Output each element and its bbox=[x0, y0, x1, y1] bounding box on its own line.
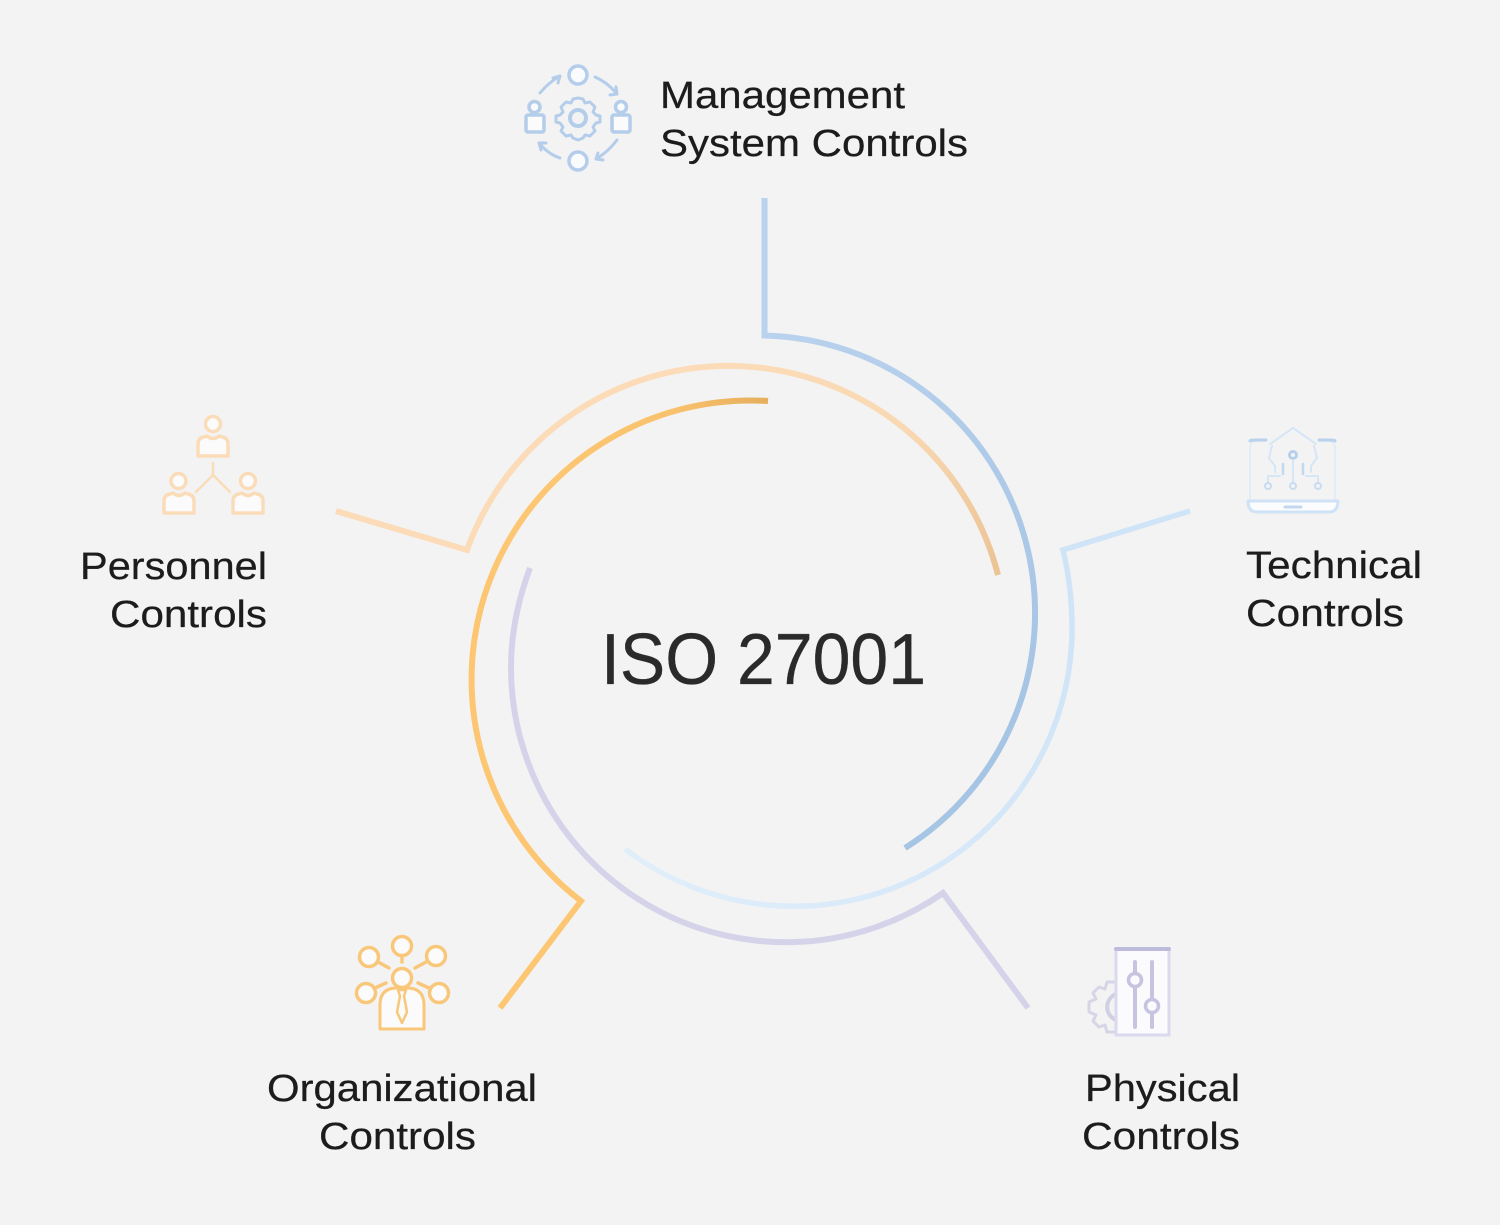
icon: personnel hierarchy bbox=[164, 416, 263, 513]
arc: personnel controls bbox=[336, 366, 998, 575]
label: organizational controls bbox=[267, 1068, 537, 1158]
label: organizational controls: Controls bbox=[319, 1116, 476, 1158]
label: management system controls bbox=[660, 75, 968, 165]
label: physical controls: Controls bbox=[1082, 1116, 1240, 1158]
label: organizational controls: Organizational bbox=[267, 1068, 537, 1110]
icon: management cycle with gear and people bbox=[526, 66, 630, 170]
label: personnel controls bbox=[80, 546, 267, 636]
title: ISO 27001: ISO 27001 bbox=[601, 620, 926, 700]
label: technical controls: Technical bbox=[1246, 545, 1422, 587]
arc: physical controls bbox=[511, 568, 1028, 1008]
icon: laptop with circuit bbox=[1248, 428, 1338, 512]
arc: management system controls bbox=[764, 198, 1035, 848]
label: physical controls bbox=[1082, 1068, 1240, 1158]
label: technical controls: Controls bbox=[1246, 593, 1404, 635]
label: physical controls: Physical bbox=[1085, 1068, 1240, 1110]
icon: control panel with sliders and gear bbox=[1089, 949, 1169, 1035]
label: technical controls bbox=[1246, 545, 1422, 635]
label: personnel controls: Controls bbox=[110, 594, 267, 636]
icon: organization person with network bbox=[356, 936, 448, 1029]
arc: technical controls bbox=[625, 511, 1190, 906]
arc: organizational controls bbox=[472, 400, 768, 1008]
label: personnel controls: Personnel bbox=[80, 546, 267, 588]
label: management system controls: Management bbox=[660, 75, 905, 117]
label: management system controls: System Controls bbox=[660, 123, 968, 165]
